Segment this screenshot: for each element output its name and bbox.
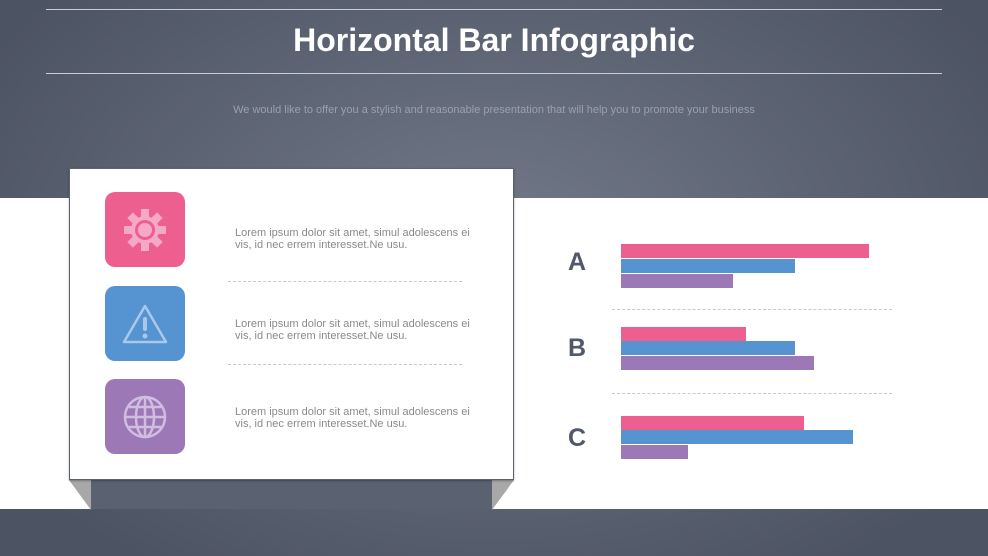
fold left (69, 480, 91, 510)
subtitle: We would like to offer you a stylish and reasonable presentation that will help you to promote your business (233, 104, 755, 116)
label B: B (568, 334, 586, 362)
text 3: Lorem ipsum dolor sit amet, simul adolescens ei vis, id nec errem interesset.Ne usu. (235, 406, 470, 430)
white band (0, 198, 988, 509)
panel: card (69, 168, 514, 480)
fold right (492, 480, 514, 510)
bar chart (568, 248, 586, 452)
icon: globe (105, 379, 185, 454)
label A: A (568, 248, 586, 276)
icon: warning (105, 286, 185, 361)
title: Horizontal Bar Infographic (293, 22, 695, 58)
label C: C (568, 424, 586, 452)
text 1: Lorem ipsum dolor sit amet, simul adolescens ei vis, id nec errem interesset.Ne usu. (235, 227, 470, 251)
icon: gear (105, 192, 185, 267)
text 2: Lorem ipsum dolor sit amet, simul adolescens ei vis, id nec errem interesset.Ne usu. (235, 318, 470, 342)
